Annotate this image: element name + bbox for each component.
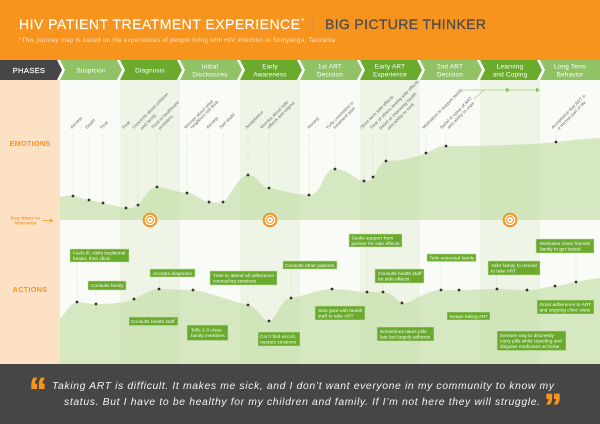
emotion labels [69, 79, 587, 131]
action boxes: staff to take ART [318, 314, 354, 318]
action boxes: Consults other patients [285, 263, 335, 268]
phase: label [0, 60, 62, 80]
subtitle: *This journey map is based on the experiences of people living with HIV infection in Shinyanga, Tanzania. [19, 37, 337, 44]
quote text: Taking ART is difficult. It makes me sick, and I don’t want everyone in my community to know my [52, 381, 555, 392]
action boxes: Tells 2-3 close [191, 328, 222, 332]
emotion labels: Anxiety [205, 115, 220, 130]
phases row: Learning [497, 64, 523, 70]
phases row: Decision [317, 72, 343, 78]
action boxes: Can't find escort, [260, 334, 296, 339]
action boxes: Asks family to remind [491, 263, 537, 268]
action boxes: carry pills while traveling and [500, 338, 562, 343]
emotion labels: Fear of others seeing side effects [369, 79, 420, 130]
action dots [76, 281, 577, 322]
phases row [0, 60, 600, 80]
emotion labels: Acceptance [244, 109, 265, 130]
action boxes: Tries to attend all adherence [213, 273, 274, 278]
action boxes: partner for side effects [352, 241, 400, 246]
action boxes [70, 234, 594, 350]
action boxes: Feels ill, visits traditional [73, 250, 125, 256]
emotion labels: Acceptance that ART is [550, 93, 587, 130]
target icons [144, 214, 516, 226]
phases row: 2nd ART [437, 64, 463, 70]
action boxes: Consults family [91, 283, 124, 288]
action boxes: Devises way to discreetly [500, 333, 555, 338]
phases row: Awareness [253, 72, 287, 78]
phases row: Decision [437, 72, 463, 78]
header banner [0, 0, 600, 60]
actions area curve [60, 278, 600, 364]
emotion labels: and ability to work [386, 101, 416, 131]
phases row: Long Term [554, 64, 586, 70]
action boxes: Accepts diagnosis [153, 271, 192, 276]
key times callout: Key times to [11, 216, 40, 220]
quote footer [0, 364, 600, 424]
emotion labels: Doubt [84, 117, 97, 130]
asterisk: * [301, 17, 304, 26]
emotion labels: a normal part of life [556, 99, 587, 131]
emotion labels: Trust in healthcare [150, 100, 180, 130]
emotion labels: and ability to cope [446, 100, 476, 130]
emotion labels: Anxiety [69, 115, 84, 130]
heading: emotions: EMOTIONS [9, 139, 51, 148]
peach sidebar [0, 80, 60, 364]
emotion labels: Worries about what [183, 98, 215, 130]
phases row: Experience [373, 72, 407, 78]
action boxes: Sometimes takes pills [380, 329, 427, 334]
phases row: and Coping [493, 72, 528, 78]
emotion labels: Fully committed to [325, 100, 355, 130]
action boxes: disguise medicines at home [500, 344, 560, 349]
heading: actions: ACTIONS [13, 285, 47, 294]
emotions area curve [60, 138, 600, 220]
action boxes: Tells extended family [430, 256, 475, 260]
persona title: BIG PICTURE THINKER [325, 16, 486, 32]
action boxes: Motivates close friends/ [540, 241, 591, 246]
action boxes: healer, then clinic [73, 256, 111, 261]
action boxes: Keeps taking ART [450, 314, 488, 319]
action boxes: Good adherence to ART [540, 302, 591, 307]
emotion leader lines [73, 134, 556, 208]
emotion labels: Self doubt [218, 111, 237, 130]
phases row: PHASES [13, 66, 45, 75]
emotion labels: Anxiety [306, 115, 321, 130]
quote footer: status. But I have to be healthy for my children and family. If I’m not here they will struggle. [64, 397, 540, 408]
key times callout [11, 216, 53, 226]
phases row: Disclosures [192, 72, 228, 78]
progress arrow [463, 88, 540, 99]
emotion dots [72, 141, 557, 209]
title divider [311, 18, 314, 30]
phases row: Early ART [375, 64, 405, 70]
action boxes: counseling sessions [213, 278, 257, 284]
phases row: Suspicion [76, 68, 106, 74]
phases row: 1st ART [318, 64, 342, 70]
action boxes: Sets goal with health [318, 308, 363, 313]
emotion labels: Fear [121, 119, 132, 130]
emotion labels: Fear [99, 119, 110, 130]
key times callout: intervene [15, 220, 37, 226]
action boxes: family to get tested [540, 246, 581, 252]
column bands [60, 80, 600, 364]
emotion labels: and family [139, 112, 158, 131]
title: HIV PATIENT TREATMENT EXPERIENCE [19, 16, 300, 32]
emotion labels: Concerns about children [131, 91, 170, 130]
emotion labels: Worries about side [259, 99, 290, 130]
phases row: Early [262, 64, 278, 70]
emotion labels: neighbors will think [189, 99, 220, 130]
emotion labels: Short term side effects [359, 94, 395, 130]
action leader lines [77, 247, 576, 332]
action boxes: for side effects [378, 276, 410, 282]
emotion labels: providers [157, 114, 174, 131]
action boxes: Consults health staff [378, 271, 422, 276]
emotion labels: effects and stigma [266, 100, 296, 130]
emotion labels: Motivation to support family [421, 87, 464, 130]
phases row: Diagnosis [135, 68, 165, 74]
action boxes: Consults health staff [131, 319, 175, 324]
action boxes: family members [191, 333, 225, 338]
action boxes: and ongoing clinic visits [540, 308, 591, 312]
phases row: Behavior [557, 72, 584, 78]
action boxes: to take ART [491, 268, 516, 274]
emotion labels: treatment plan [332, 105, 356, 130]
emotion labels: Relief at improving health [378, 91, 418, 131]
phases row: Initial [202, 64, 218, 70]
emotion labels: Belief in value of ART [439, 96, 473, 130]
action boxes: Seeks support from [352, 236, 393, 240]
opening quote mark: “ [29, 370, 47, 411]
action boxes: late but largely adheres [380, 334, 431, 340]
action boxes: repeats sessions [260, 340, 297, 344]
